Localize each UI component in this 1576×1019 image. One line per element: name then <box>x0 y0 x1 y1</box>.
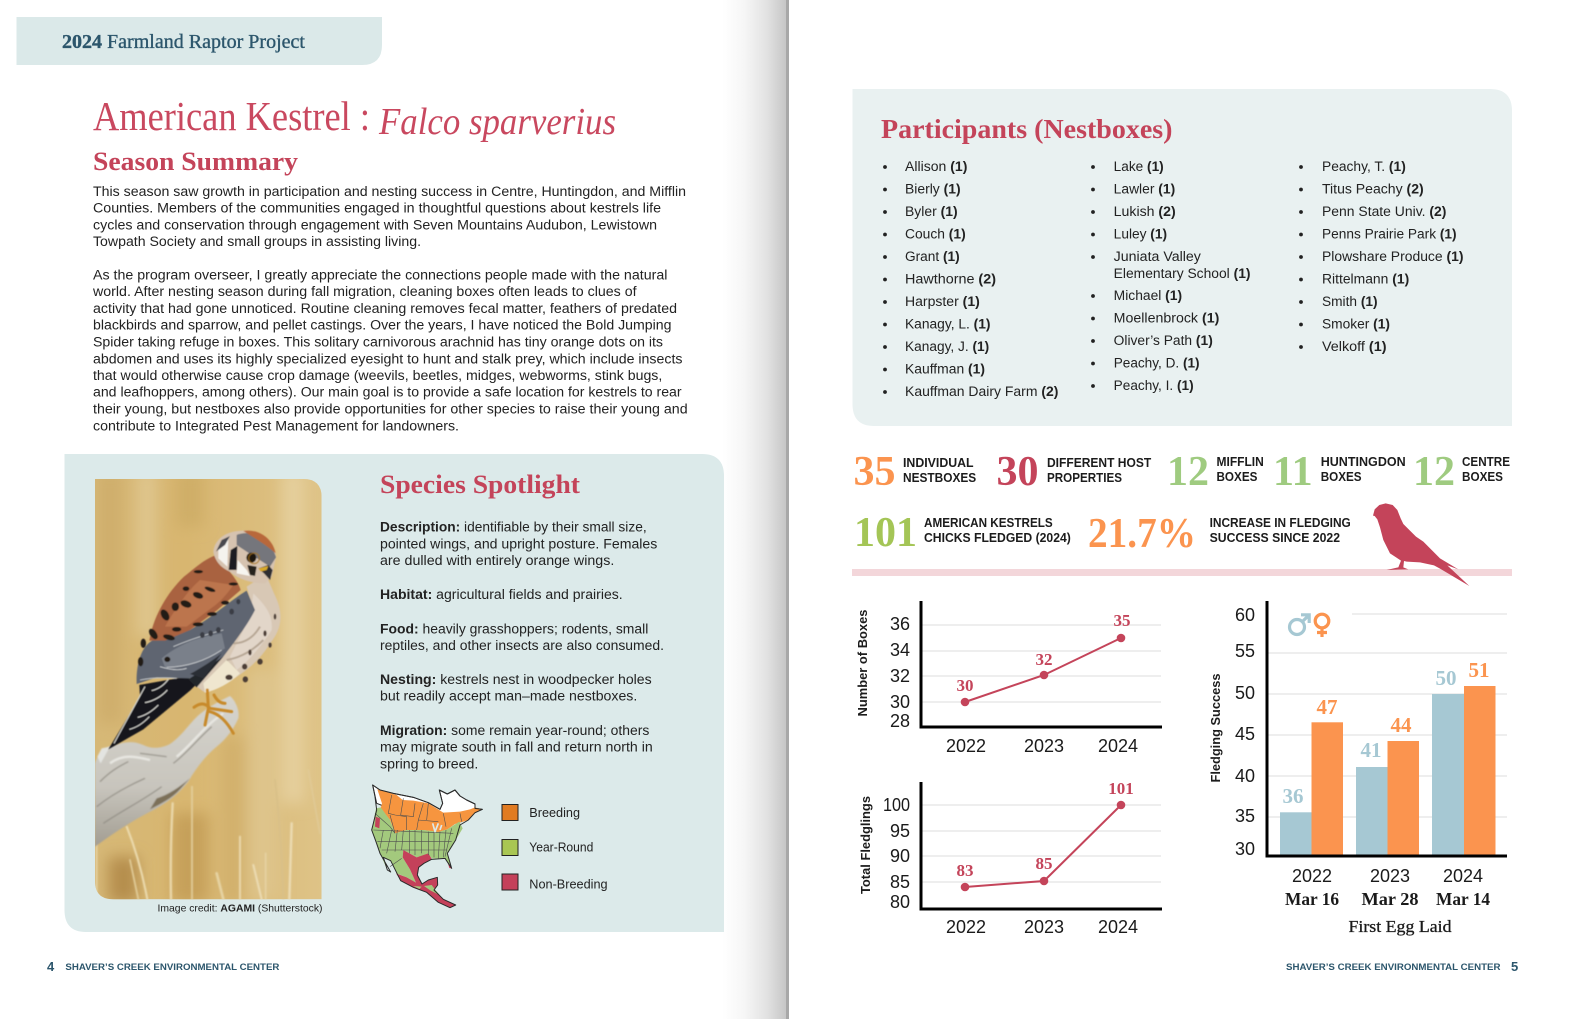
title: species name: American Kestrel : <box>93 93 370 139</box>
stat: 101 chicks fledged: AMERICAN KESTRELS <box>924 516 1053 530</box>
panel: species spotlight <box>64 454 724 932</box>
participant list: column 1: Grant (1) <box>905 249 960 264</box>
page gutter shadow <box>722 0 789 1019</box>
stat: 21.7% increase: 21.7% <box>1088 511 1196 557</box>
stat: 11 huntingdon boxes: BOXES <box>1321 470 1362 484</box>
green year-round range <box>372 807 463 883</box>
footer: right page: SHAVER’S CREEK ENVIRONMENTAL CENTER <box>1286 962 1501 973</box>
chart: number of boxes <box>855 601 1162 756</box>
participant list: column 3: Titus Peachy (2) <box>1322 182 1424 196</box>
participant list: column 3: Velkoff (1) <box>1322 339 1386 354</box>
chart: total fledglings: 85 <box>890 872 910 892</box>
participant list: column 1: Kanagy, L. (1) <box>905 316 990 332</box>
stat: 12 centre boxes: BOXES <box>1462 470 1503 484</box>
text block: season summary intro <box>93 184 686 249</box>
legend: non-breeding: Non-Breeding <box>529 878 608 892</box>
participant list: column 1: Byler (1) <box>905 204 958 219</box>
chart: number of boxes: 2024 <box>1098 736 1138 756</box>
stat: 101 chicks fledged: 101 <box>854 510 917 556</box>
text block: habitat: Habitat: agricultural fields and prairies. <box>380 587 623 602</box>
bars: 2022: 47 <box>1316 695 1338 719</box>
stat: 12 mifflin boxes <box>1167 449 1264 495</box>
participant list: column 2: Peachy, I. (1) <box>1114 378 1194 393</box>
participant list: column 2: Michael (1) <box>1114 288 1182 303</box>
text block: program overseer notes: blackbirds and sparrow, and pellet castings. Over the years, I have noticed the Bold Jumping <box>93 318 672 333</box>
participant list: column 1: Harpster (1) <box>905 294 980 309</box>
chart: number of boxes: Number of Boxes <box>855 610 870 716</box>
header tab <box>16 17 382 65</box>
chart: number of boxes: 30 <box>890 692 910 712</box>
chart: fledging success bars: 60 <box>1235 605 1255 625</box>
stat: 35 individual nestboxes: INDIVIDUAL <box>903 456 974 470</box>
stat: 101 chicks fledged: CHICKS FLEDGED (2024) <box>924 531 1071 545</box>
range map: north america <box>372 785 482 908</box>
map legend <box>502 804 608 892</box>
text block: season summary intro: This season saw growth in participation and nesting success in Centre, Huntingdon, and Mifflin <box>93 184 686 199</box>
stat: 21.7% increase: INCREASE IN FLEDGING <box>1210 516 1351 530</box>
participant list: column 2: Juniata Valley <box>1114 249 1201 264</box>
chart: fledging success bars: 45 <box>1235 724 1255 744</box>
stat: 12 mifflin boxes: 12 <box>1167 449 1209 495</box>
text block: program overseer notes: that would otherwise cause crop damage (weevils, beetles, midges, webworms, stink bugs, <box>93 368 662 383</box>
bars: 2024: 51 <box>1468 658 1490 682</box>
participant list: column 1: Allison (1) <box>905 159 967 174</box>
white northern land <box>373 785 482 817</box>
participant list: column 1: Kauffman (1) <box>905 362 985 376</box>
chart: fledging success bars: Mar 16 <box>1285 889 1339 909</box>
participant list: column 2: Elementary School (1) <box>1114 266 1250 281</box>
image credit caption: Image credit: AGAMI (Shutterstock) <box>158 902 322 914</box>
participant list: column 1: Kauffman Dairy Farm (2) <box>905 384 1058 399</box>
bars: 2024 <box>1432 658 1496 856</box>
chart: fledging success bars: Mar 28 <box>1362 889 1418 909</box>
text block: program overseer notes: contribute to Integrated Pest Management for landowners. <box>93 418 459 433</box>
text block: migration: spring to breed. <box>380 756 478 771</box>
stat: 12 centre boxes: CENTRE <box>1462 455 1510 469</box>
footer: left page: SHAVER’S CREEK ENVIRONMENTAL CENTER <box>65 962 280 973</box>
stat: 12 mifflin boxes: MIFFLIN <box>1216 455 1264 469</box>
stat: 35 individual nestboxes <box>854 449 976 495</box>
chart: fledging success bars: 2023 <box>1370 866 1410 886</box>
participant list: column 3 <box>1299 159 1464 354</box>
chart: total fledglings <box>858 779 1162 937</box>
icon: kestrel silhouette <box>1373 503 1469 586</box>
chart: total fledglings: 2022 <box>946 917 986 937</box>
divider perch bar <box>852 569 1512 576</box>
title: scientific name: Falco sparverius <box>378 101 616 143</box>
text block: migration <box>380 723 653 771</box>
body <box>197 575 281 693</box>
heading: season summary: Season Summary <box>93 147 298 176</box>
chart: total fledglings: 2024 <box>1098 917 1138 937</box>
text block: nesting: but readily accept man–made nestboxes. <box>380 689 637 704</box>
orange breeding range <box>377 789 482 833</box>
header tab text: 2024 Farmland Raptor Project <box>62 32 306 53</box>
chart: fledging success bars: 40 <box>1235 766 1255 786</box>
branch <box>95 696 239 847</box>
chart: number of boxes: 35 <box>1114 611 1130 630</box>
chart: fledging success bars: 2022 <box>1292 866 1332 886</box>
chart: number of boxes: 30 <box>956 676 974 695</box>
bars: 2022 <box>1280 695 1343 856</box>
text block: description: are dulled with entirely orange wings. <box>380 553 614 568</box>
stat: 21.7% increase: SUCCESS SINCE 2022 <box>1210 531 1340 545</box>
chart: number of boxes: 34 <box>890 640 910 660</box>
state and province lines <box>373 795 462 867</box>
legend: breeding: Breeding <box>529 806 580 820</box>
footer: right page <box>1286 959 1518 974</box>
text block: description <box>380 520 658 568</box>
bars: 2023: 44 <box>1390 713 1412 737</box>
participant list: column 3: Plowshare Produce (1) <box>1322 249 1464 264</box>
tail <box>108 677 197 749</box>
chart: total fledglings: 100 <box>883 795 910 815</box>
title: species name <box>93 93 616 143</box>
participant list: column 2: Oliver’s Path (1) <box>1114 333 1213 348</box>
chart: fledging success bars: Mar 14 <box>1436 889 1490 909</box>
chart: total fledglings: 80 <box>890 892 910 912</box>
text block: description: pointed wings, and upright posture. Females <box>380 536 658 551</box>
footer: right page: 5 <box>1511 959 1518 974</box>
text block: season summary intro: Towpath Society and small groups in assisting living. <box>93 234 421 249</box>
participant list: column 2: Peachy, D. (1) <box>1114 356 1200 370</box>
chart: fledging success bars: Fledging Success <box>1208 674 1223 782</box>
chart: fledging success bars: First Egg Laid <box>1348 917 1452 936</box>
participant list: column 1: Kanagy, J. (1) <box>905 339 989 354</box>
participant list: column 3: Smoker (1) <box>1322 316 1390 332</box>
chart: number of boxes: 28 <box>890 711 910 731</box>
text block: program overseer notes: Spider taking refuge in boxes. This solitary carnivorous arachnid has tiny orange dots on its <box>93 335 663 350</box>
text block: season summary intro: Counties. Members of the communities engaged in thoughtful questions about kestrels life <box>93 201 661 216</box>
participant list: column 3: Rittelmann (1) <box>1322 272 1409 286</box>
participant list: column 2: Luley (1) <box>1114 226 1167 242</box>
wing <box>137 591 255 687</box>
footer: left page <box>47 959 280 974</box>
text block: season summary intro: cycles and conservation through engagement with Seven Mountains Audubon, Lewistown <box>93 217 657 232</box>
text block: nesting: Nesting: kestrels nest in woodpecker holes <box>380 672 652 687</box>
chart: total fledglings: 2023 <box>1024 917 1064 937</box>
panel: participants <box>852 89 1512 426</box>
heading: species spotlight: Species Spotlight <box>380 470 580 499</box>
stat: 35 individual nestboxes: NESTBOXES <box>903 471 976 485</box>
participant list: column 2: Lawler (1) <box>1114 182 1175 196</box>
text block: food: reptiles, and other insects are also consumed. <box>380 638 664 653</box>
heading: participants: Participants (Nestboxes) <box>881 114 1172 144</box>
stat: 11 huntingdon boxes <box>1273 449 1406 495</box>
chart: total fledglings: 85 <box>1036 854 1052 873</box>
stat: 30 different host properties <box>996 449 1152 495</box>
participant list: column 3: Smith (1) <box>1322 294 1378 309</box>
text block: program overseer notes: their young, but nestboxes also provide opportunities for other species to raise their young and <box>93 402 688 417</box>
text block: program overseer notes: abdomen and uses its highly specialized eyesight to hunt and stalk prey, which include insects <box>93 351 683 366</box>
chart: number of boxes: 2023 <box>1024 736 1064 756</box>
chart: fledging success bars: 50 <box>1235 683 1255 703</box>
text block: program overseer notes <box>92 267 688 433</box>
footer: left page: 4 <box>47 959 55 974</box>
text block: nesting <box>380 672 652 704</box>
participant list: column 2 <box>1091 159 1250 393</box>
chart: number of boxes: 36 <box>890 614 910 634</box>
chart: fledging success bars <box>1208 601 1507 936</box>
text block: description: Description: identifiable by their small size, <box>380 520 647 535</box>
stat: 11 huntingdon boxes: 11 <box>1273 449 1313 495</box>
participant list: column 3: Penn State Univ. (2) <box>1322 204 1446 219</box>
text block: program overseer notes: activity that had gone unnoticed. Routine cleaning removes fecal matter, feathers of predated <box>93 301 677 316</box>
chart: total fledglings: Total Fledglings <box>858 796 873 894</box>
stat: 35 individual nestboxes: 35 <box>854 449 896 495</box>
head <box>213 531 276 583</box>
stat: 30 different host properties: DIFFERENT HOST <box>1047 456 1152 470</box>
back <box>149 555 241 641</box>
text block: food <box>380 621 664 653</box>
participant list: column 3: Peachy, T. (1) <box>1322 159 1406 174</box>
icon: male and female symbols <box>1290 614 1329 637</box>
participant list: column 1 <box>883 159 1058 399</box>
participant list: column 1: Couch (1) <box>905 226 966 242</box>
chart: number of boxes: 32 <box>1036 650 1052 669</box>
participant list: column 2: Lukish (2) <box>1114 204 1176 219</box>
chart: total fledglings: 83 <box>956 861 974 880</box>
text block: program overseer notes: world. After nesting season during fall migration, cleaning boxes often leads to clues of <box>92 284 637 299</box>
stat: 12 centre boxes: 12 <box>1413 449 1455 495</box>
bars: 2023 <box>1356 713 1419 856</box>
stat: 21.7% increase <box>1088 511 1351 557</box>
participant list: column 3: Penns Prairie Park (1) <box>1322 226 1457 242</box>
chart: fledging success bars: 30 <box>1235 839 1255 859</box>
photo: american kestrel on branch <box>95 470 322 903</box>
chart: number of boxes: 32 <box>890 666 910 686</box>
coastline <box>372 785 482 908</box>
chart: fledging success bars: 2024 <box>1443 866 1483 886</box>
text block: program overseer notes: As the program overseer, I greatly appreciate the connections people made with the natural <box>93 267 667 282</box>
text block: program overseer notes: and leafhoppers, among others). Our main goal is to provide a safe location for kestrels to rear <box>93 385 682 400</box>
text block: migration: may migrate south in fall and return north in <box>380 740 653 755</box>
participant list: column 1: Bierly (1) <box>905 182 961 196</box>
participant list: column 2: Lake (1) <box>1114 159 1164 174</box>
chart: fledging success bars: 35 <box>1235 806 1255 826</box>
red non-breeding range <box>396 850 456 908</box>
stat: 101 chicks fledged <box>854 510 1071 556</box>
chart: total fledglings: 101 <box>1108 779 1134 798</box>
feet <box>194 690 233 733</box>
stat: 30 different host properties: 30 <box>996 449 1038 495</box>
legend: year-round: Year-Round <box>529 841 593 855</box>
participant list: column 1: Hawthorne (2) <box>905 272 996 286</box>
participant list: column 2: Moellenbrock (1) <box>1114 310 1219 326</box>
stat: 12 centre boxes <box>1413 449 1510 495</box>
chart: fledging success bars: 55 <box>1235 641 1255 661</box>
bars: 2022: 36 <box>1282 784 1304 808</box>
stat: 11 huntingdon boxes: HUNTINGDON <box>1321 455 1406 469</box>
bars: 2024: 50 <box>1436 666 1456 690</box>
chart: total fledglings: 95 <box>890 821 910 841</box>
stat: 12 mifflin boxes: BOXES <box>1216 470 1257 484</box>
chart: total fledglings: 90 <box>890 846 910 866</box>
bars: 2023: 41 <box>1360 738 1382 762</box>
chart: number of boxes: 2022 <box>946 736 986 756</box>
text block: food: Food: heavily grasshoppers; rodents, small <box>380 621 648 636</box>
text block: migration: Migration: some remain year-round; others <box>380 723 650 738</box>
stat: 30 different host properties: PROPERTIES <box>1047 471 1122 485</box>
